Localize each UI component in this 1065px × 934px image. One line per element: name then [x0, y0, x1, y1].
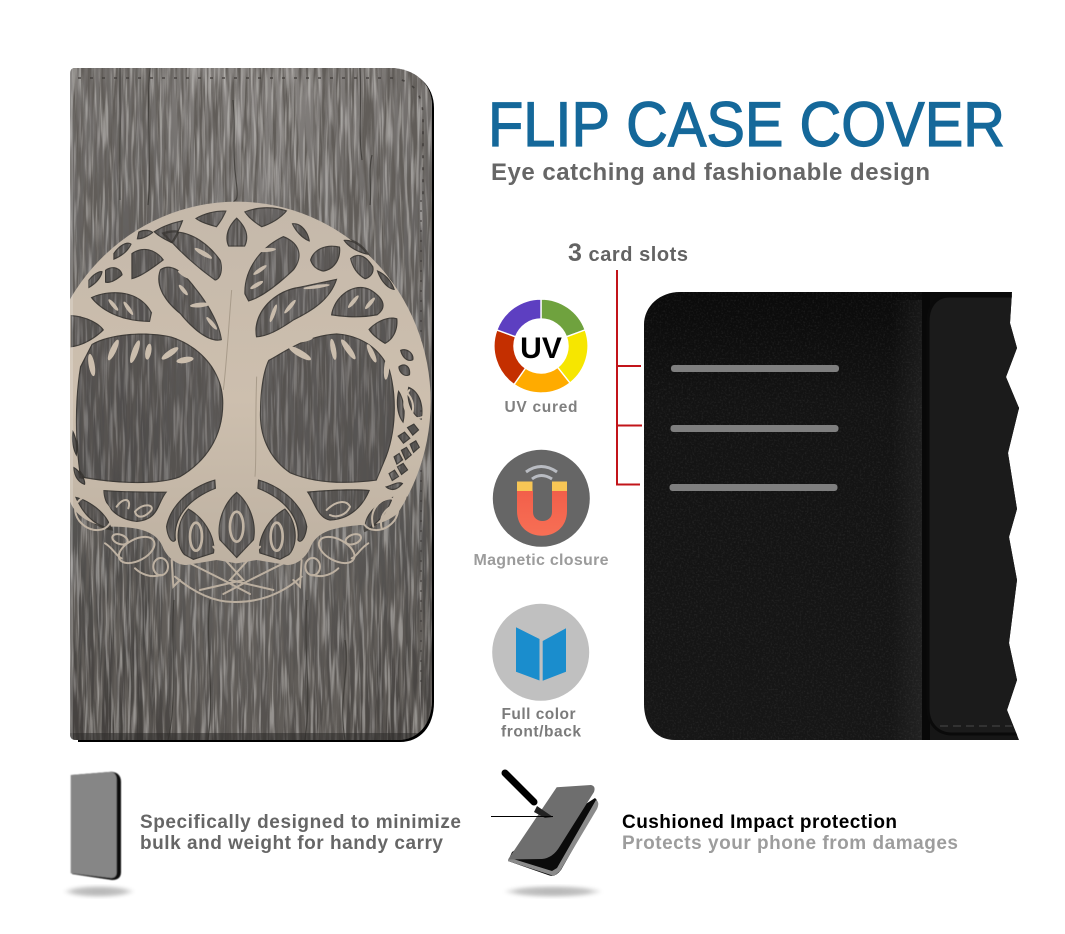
card slots label: 3 card slots [568, 239, 688, 267]
left edge highlight [70, 68, 73, 740]
panel: flip case front with wood design [40, 68, 440, 743]
UV icon text: UV [520, 332, 562, 365]
label: magnetic closure: Magnetic closure [474, 552, 609, 569]
text: cushioned impact protection: Cushioned Impact protection [622, 812, 897, 833]
panel: open case interior [640, 288, 1025, 744]
icon: magnet [493, 450, 590, 547]
leather texture [644, 292, 929, 742]
text: slim design: Specifically designed to minimize [140, 812, 461, 833]
card slot 2 [670, 425, 838, 432]
spine [922, 292, 930, 740]
shadow under slim case [63, 886, 135, 898]
subtitle: Eye catching and fashionable design [491, 159, 930, 186]
label: UV cured: UV cured [504, 399, 578, 416]
label: full color front/back: front/back [501, 724, 581, 740]
text: cushioned impact protection: Protects your phone from damages [622, 833, 958, 854]
tray lip [940, 725, 1012, 727]
icon: open book [492, 604, 589, 701]
tree of life emblem [70, 202, 431, 603]
red bracket for card slots [617, 270, 642, 484]
label: full color front/back: Full color [502, 706, 576, 723]
label: full color front/back [501, 706, 581, 740]
case black edge [78, 70, 434, 742]
text: slim design [140, 812, 461, 854]
stitching [78, 78, 423, 200]
icon: cushioned open case with stylus [491, 773, 598, 876]
icon: slim case side view [71, 772, 121, 880]
title: FLIP CASE COVER [488, 90, 1005, 160]
text: slim design: bulk and weight for handy carry [140, 833, 443, 854]
card slot 3 [670, 484, 838, 491]
text: cushioned impact protection [622, 812, 958, 854]
card slot 1 [671, 365, 839, 372]
wood surface [40, 68, 440, 743]
bottom edge shading [70, 733, 432, 740]
spine highlight [912, 300, 922, 740]
icon: UV ring [494, 299, 588, 393]
phone inner tray [928, 296, 1020, 734]
shadow under cushioned case [503, 886, 603, 898]
